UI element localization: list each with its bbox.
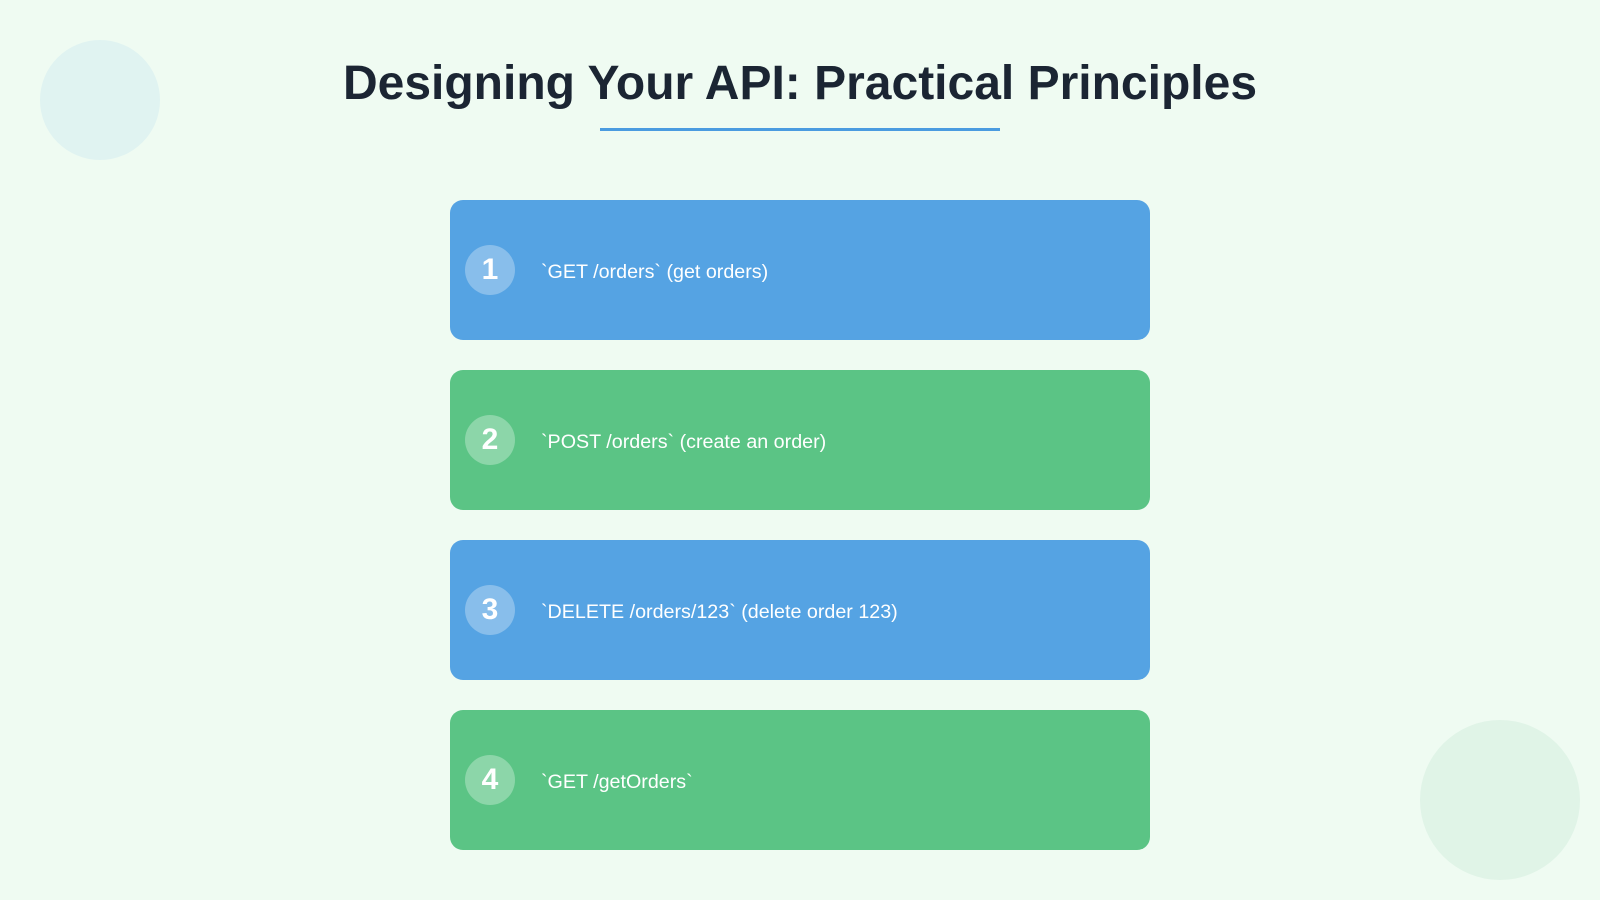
badge 1 [465, 245, 515, 295]
decoration: bottom-right circle [1420, 720, 1580, 880]
card 4 [450, 710, 1150, 850]
card 2 [450, 370, 1150, 510]
badge 3: 3 [482, 593, 498, 626]
title underline [600, 128, 1000, 131]
card 3 [450, 540, 1150, 680]
text 1: `GET /orders` (get orders) [541, 261, 768, 283]
badge 2 [465, 415, 515, 465]
text 3: `DELETE /orders/123` (delete order 123) [541, 601, 898, 623]
decoration: top-left circle [40, 40, 160, 160]
badge 2: 2 [482, 423, 498, 456]
badge 1: 1 [482, 253, 498, 286]
text 2: `POST /orders` (create an order) [541, 431, 826, 453]
badge 3 [465, 585, 515, 635]
badge 4 [465, 755, 515, 805]
badge 4: 4 [482, 763, 498, 796]
card 1 [450, 200, 1150, 340]
text 4: `GET /getOrders` [541, 771, 693, 793]
title: Designing Your API: Practical Principles [343, 57, 1257, 110]
